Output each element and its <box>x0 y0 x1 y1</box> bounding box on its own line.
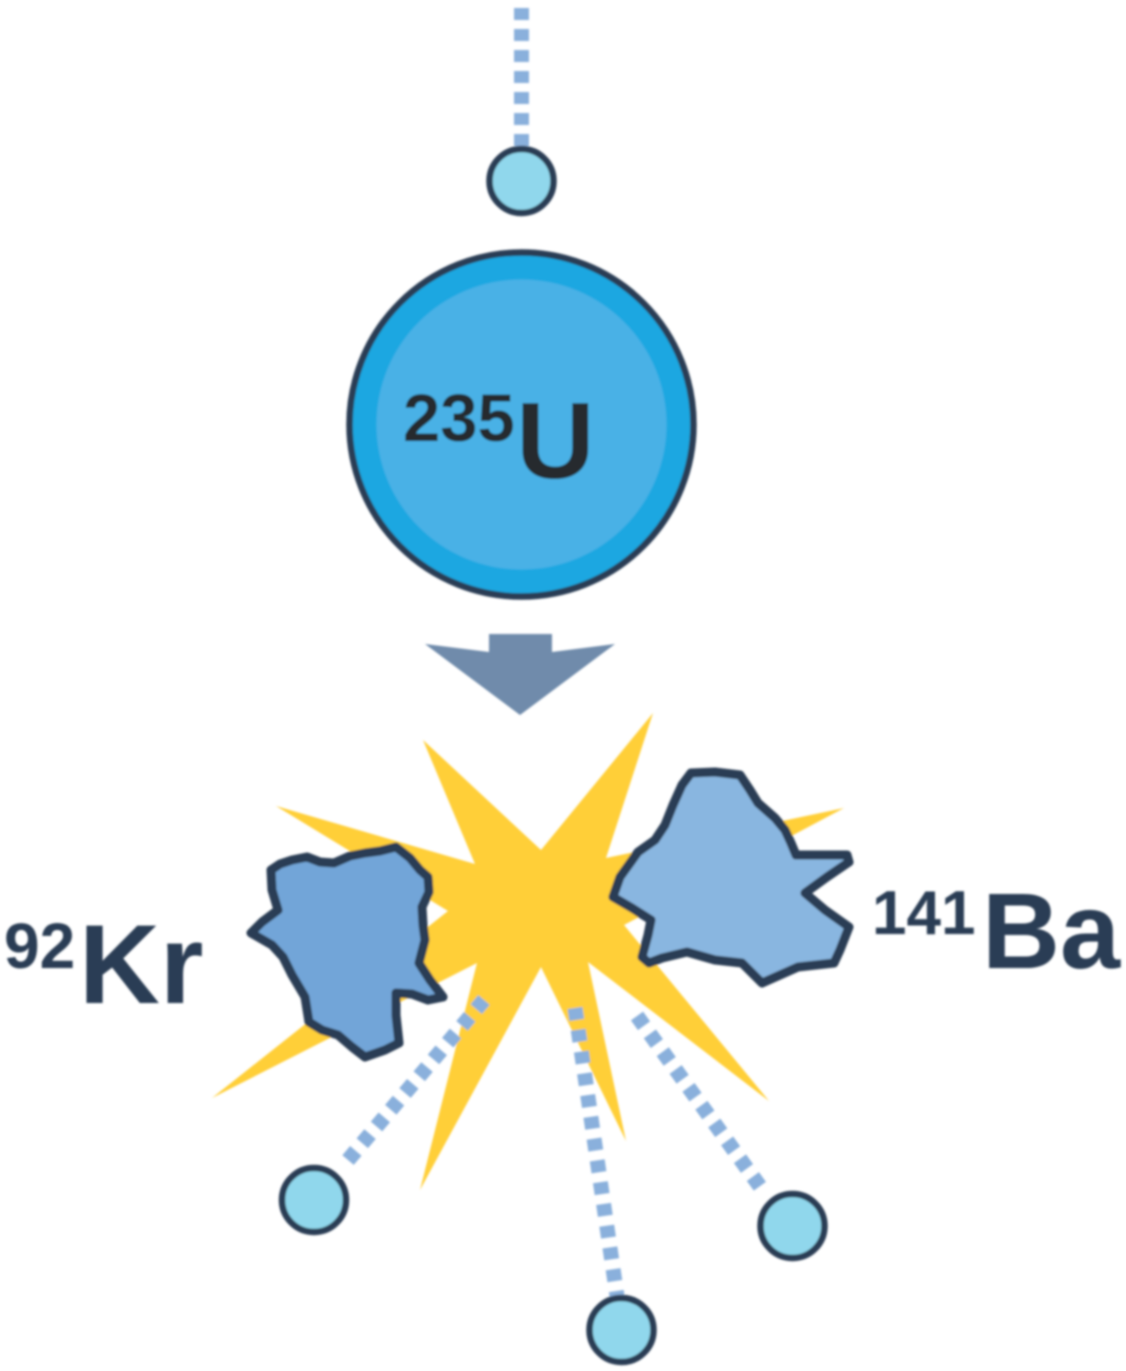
uranium-235 nucleus <box>350 252 694 596</box>
incoming neutron path <box>514 0 529 146</box>
emitted neutron bottom <box>590 1298 654 1362</box>
uranium-235 nucleus: 235 <box>403 381 515 456</box>
reaction arrow <box>425 634 615 715</box>
emitted neutron right <box>760 1194 824 1258</box>
barium label: Ba <box>982 870 1121 991</box>
barium-141 fragment <box>613 772 849 983</box>
krypton-92 fragment <box>251 847 443 1057</box>
emitted neutron paths <box>343 1000 764 1296</box>
krypton label: 92 <box>4 910 75 982</box>
incoming neutron <box>490 149 554 213</box>
barium label: 141 <box>872 879 975 948</box>
emitted neutron left <box>282 1168 346 1232</box>
krypton label <box>4 902 203 1027</box>
uranium-235 nucleus: U <box>516 380 595 502</box>
krypton label: Kr <box>79 902 203 1027</box>
explosion burst <box>212 713 844 1190</box>
barium label <box>872 870 1121 991</box>
